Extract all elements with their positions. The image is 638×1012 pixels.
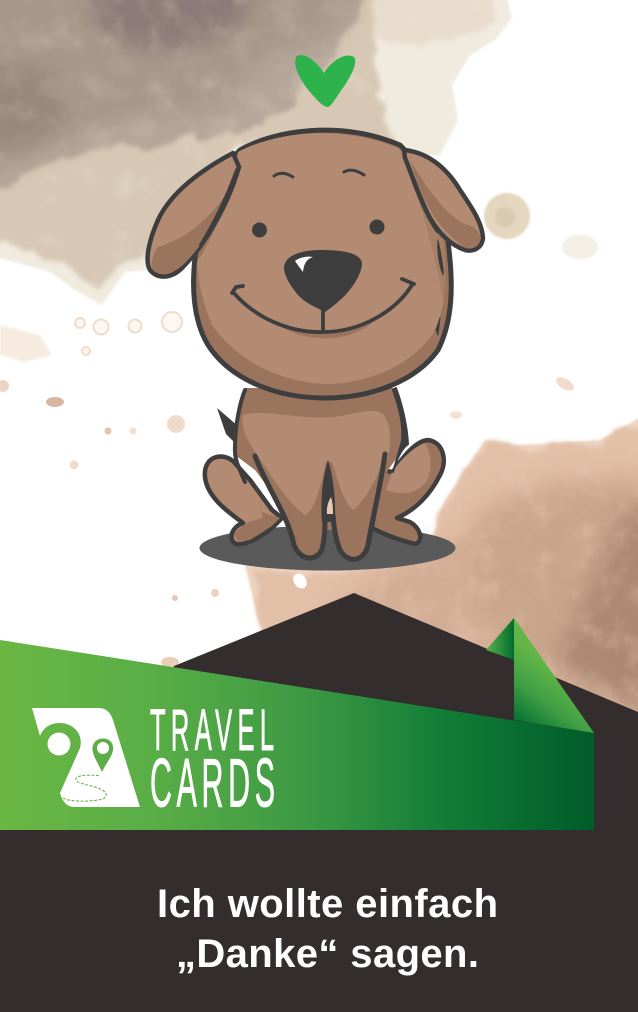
logo wordmark: TRAVEL CARDS [150, 698, 275, 822]
left ear [148, 153, 239, 277]
wordmark line: CARDS: CARDS [150, 746, 275, 822]
ground shadow [200, 526, 456, 570]
wordmark line: TRAVEL: TRAVEL [150, 698, 274, 763]
small fold triangle [486, 618, 514, 660]
nose highlight [295, 257, 313, 272]
paint splatters [0, 193, 598, 667]
front legs [255, 430, 385, 559]
tail [217, 408, 238, 446]
headline [157, 882, 498, 976]
dark background shape [0, 593, 638, 1012]
watercolor background: top left [0, 0, 512, 305]
eyebrows [274, 170, 364, 177]
icon: heart [295, 55, 355, 107]
eyes [252, 220, 384, 238]
banner fold [514, 618, 594, 733]
watercolor background: bottom right [245, 402, 638, 730]
nose [284, 250, 362, 312]
body [235, 388, 408, 530]
right ear [404, 150, 483, 250]
green banner [0, 640, 594, 830]
headline line 1: Ich wollte einfach [157, 882, 498, 926]
left haunch [205, 456, 282, 544]
head [194, 130, 451, 398]
logo icon [32, 708, 140, 807]
dog illustration [148, 130, 483, 570]
right haunch [372, 440, 444, 544]
mouth [232, 279, 414, 332]
shade under mouth [275, 320, 375, 338]
headline line 2: „Danke“ sagen. [176, 932, 479, 976]
